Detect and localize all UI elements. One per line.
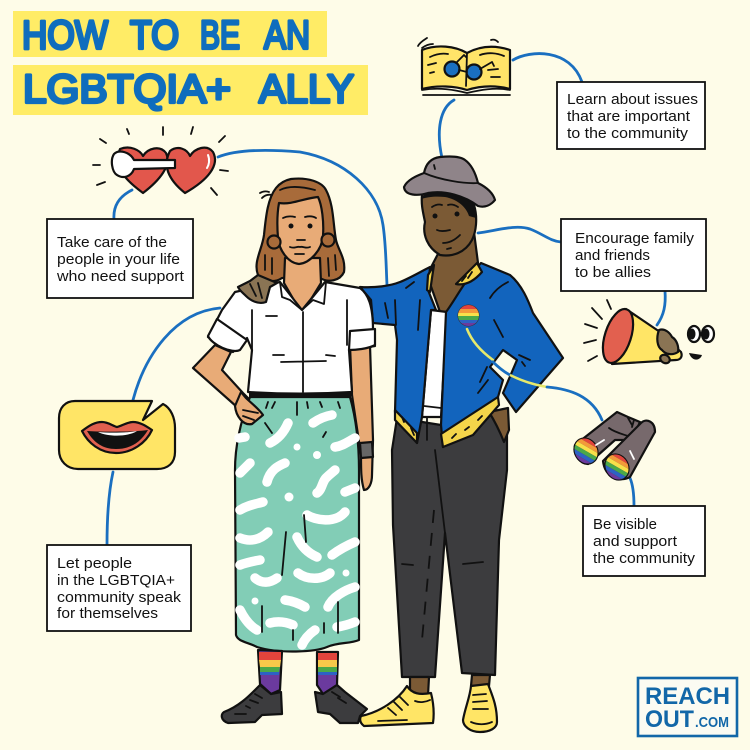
icon: hugging hearts [93,127,228,195]
title: TO [130,14,179,58]
waistband [249,393,351,397]
panel: encourage: Encourage family [575,231,695,247]
title: AN [264,14,310,58]
connector: hearts to care box [114,190,132,219]
arm left [193,345,258,408]
figure: man [360,156,563,732]
trousers [392,412,507,677]
skirt [235,397,359,652]
title [13,11,368,115]
panel: encourage [561,219,706,291]
title: ALLY [259,68,354,112]
shoes [222,685,282,723]
ankles [410,677,429,696]
connector: encourage box to megaphone [657,291,665,325]
bracelet [360,442,373,458]
panel: take care: who need support [56,269,184,285]
jacket [360,267,436,443]
logo: ReachOut.com [638,678,737,736]
figure: woman [193,179,375,723]
arm right [350,345,373,490]
rainbow badge [458,304,480,326]
panel: let people speak [47,545,191,631]
panel: let people speak: community speak [57,590,182,606]
connector: man to encourage box [478,227,561,242]
yellow shoes [360,686,434,726]
connector: book to hat [439,100,454,158]
panel: take care: people in your life [57,252,180,268]
icon: megaphone [584,300,714,367]
connector: binoculars to visible box [630,478,634,506]
title: LGBTQIA+ [23,68,231,112]
panel: let people speak: in the LGBTQIA+ [57,573,175,589]
skirt pattern [239,415,355,645]
panel: be visible: the community [593,551,696,567]
panel: take care: Take care of the [57,235,167,251]
hand on hip [489,408,509,442]
hand on hip [235,392,263,424]
icon: book with glasses [418,38,510,95]
connector: shirt to mouth [133,308,220,400]
connector: mouth to speak box [107,472,113,545]
panel: learn [557,82,705,149]
hand on shoulder [238,275,277,303]
face [422,191,476,255]
face details [432,205,460,249]
panel: encourage: to be allies [575,265,651,281]
hair [257,179,344,281]
connector: book to learn box [513,54,582,82]
face details [260,187,336,276]
shirt [208,282,375,394]
panel: let people speak: for themselves [57,606,158,622]
jacket details [385,282,530,393]
connector: badge to binoculars [467,329,602,420]
face [277,197,323,264]
sock right [317,652,338,694]
panel: learn: Learn about issues [567,92,698,108]
panel: be visible [583,506,705,576]
panel: be visible: and support [593,534,677,550]
tank top [422,310,447,417]
sock left [258,650,282,694]
icon: binoculars [573,410,656,481]
hat [404,156,495,207]
panel: learn: that are important [567,109,690,125]
panel: take care [47,219,193,298]
hair [421,187,476,218]
logo: ReachOut.com: REACH [645,683,730,710]
logo: ReachOut.com: .COM [695,714,729,731]
yellow trim [441,397,499,447]
panel: be visible: Be visible [593,517,657,533]
logo: ReachOut.com: OUT [645,706,694,733]
neck [427,232,478,312]
panel: encourage: and friends [575,248,650,264]
skirt folds [262,402,340,640]
icon: mouth speech bubble [59,401,175,469]
neck [284,258,321,314]
connector: hearts to man [218,150,387,285]
title: HOW [22,14,108,58]
title: BE [200,14,240,58]
panel: learn: to the community [567,126,689,142]
panel: let people speak: Let people [57,556,132,572]
